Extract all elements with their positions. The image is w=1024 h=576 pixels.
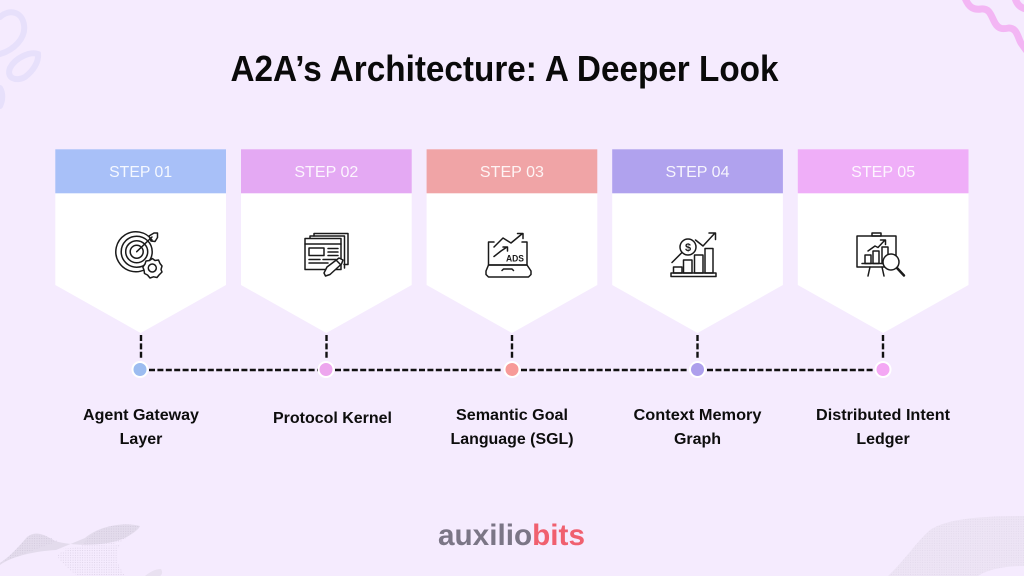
step 03 header xyxy=(427,149,597,193)
timeline dot xyxy=(318,362,334,377)
label: Layer xyxy=(120,431,162,448)
card body xyxy=(55,193,226,333)
label: Semantic Goal xyxy=(456,407,568,424)
icon: growth chart with coin: $ xyxy=(685,242,691,254)
step 02 header xyxy=(241,149,412,193)
panel: step 01 xyxy=(55,149,226,448)
timeline dot xyxy=(876,362,890,377)
step 04 header: STEP 04 xyxy=(666,164,730,181)
label: Graph xyxy=(674,431,721,448)
step 05 header: STEP 05 xyxy=(851,164,915,181)
timeline dot xyxy=(132,362,148,377)
card body xyxy=(798,193,968,333)
label: Protocol Kernel xyxy=(273,410,392,427)
icon: growth chart with coin xyxy=(671,233,716,276)
step 01 header xyxy=(55,149,226,193)
icon: target with gear xyxy=(116,232,162,278)
icon: laptop with ads chart: ADS xyxy=(506,254,524,264)
step 03 header: STEP 03 xyxy=(480,164,544,181)
card body xyxy=(241,193,412,333)
decoration: bottom-right mesh ribbon xyxy=(888,516,1024,576)
label: Context Memory xyxy=(634,407,762,424)
icon: laptop with ads chart xyxy=(486,234,531,277)
card body xyxy=(427,193,597,333)
panel: step 02 xyxy=(241,149,412,427)
timeline dot xyxy=(504,362,520,377)
timeline connector xyxy=(141,335,883,370)
decoration: top-right pink waves xyxy=(965,0,1024,50)
icon: documents with pen xyxy=(305,234,348,276)
decoration: bottom-left mesh ribbon xyxy=(0,524,162,576)
label: Language (SGL) xyxy=(450,431,574,448)
panel: step 04 xyxy=(612,149,783,448)
card body xyxy=(612,193,783,333)
icon: presentation board with magnifier xyxy=(857,233,904,276)
step 01 header: STEP 01 xyxy=(109,164,172,181)
label: Ledger xyxy=(856,431,910,448)
label: Agent Gateway xyxy=(83,407,199,424)
timeline dot xyxy=(690,362,705,377)
decoration: top-left loops xyxy=(0,12,38,106)
title: A2A’s Architecture: A Deeper Look xyxy=(230,48,779,89)
panel: step 05 xyxy=(798,149,968,448)
panel: step 03 xyxy=(427,149,597,448)
step 05 header xyxy=(798,149,968,193)
logo: auxiliobits: auxiliobits xyxy=(438,519,585,552)
label: Distributed Intent xyxy=(816,407,951,424)
step 02 header: STEP 02 xyxy=(294,164,358,181)
step 04 header xyxy=(612,149,783,193)
